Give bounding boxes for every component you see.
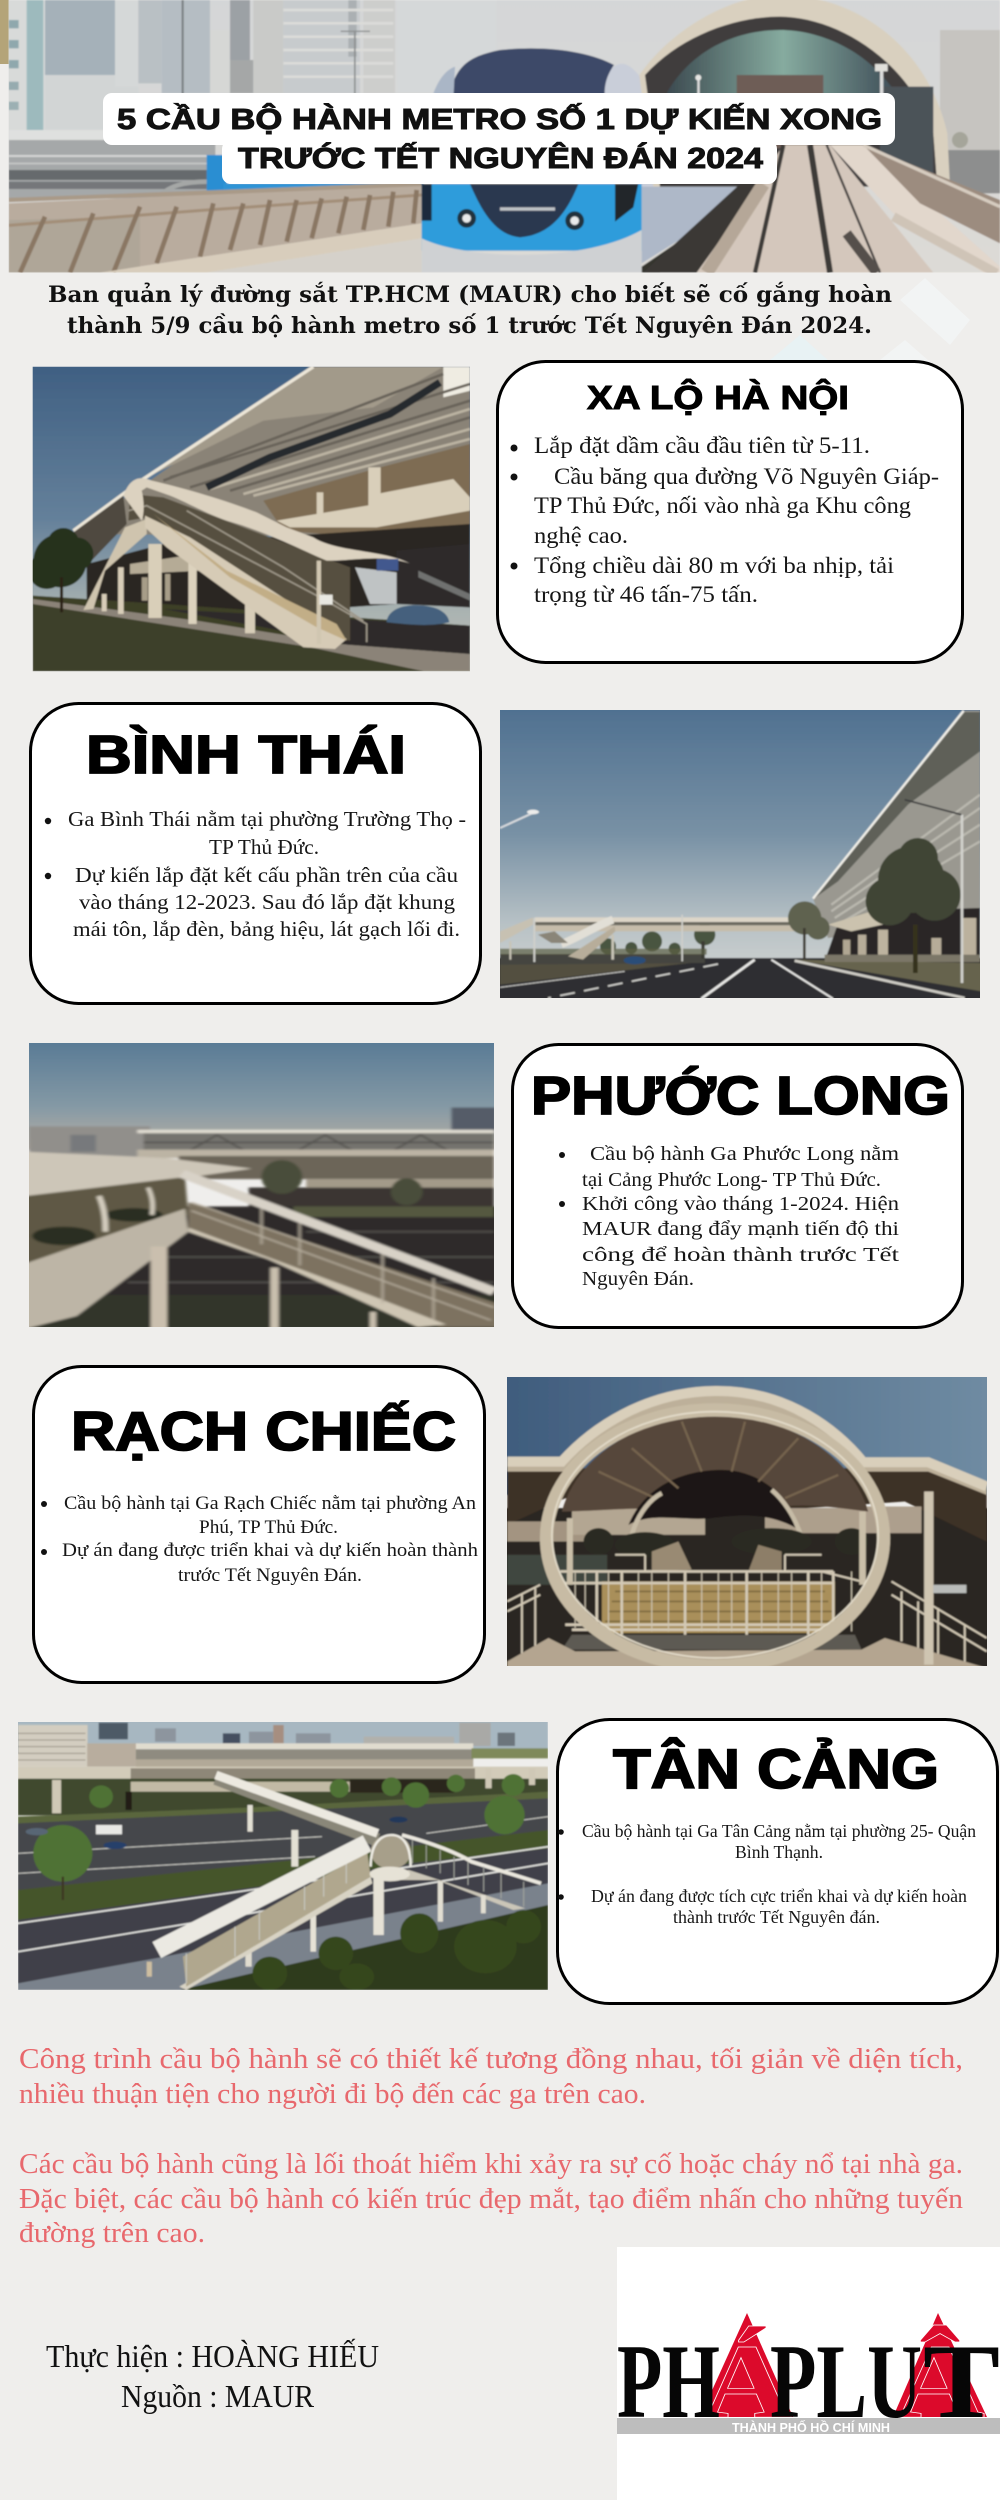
bullet list	[510, 433, 939, 607]
title background pill, second line	[222, 140, 777, 184]
closing text: đường trên cao.	[19, 2217, 205, 2249]
heading: BÌNH THÁI	[86, 725, 406, 785]
bullet list: thành trước Tết Nguyên đán.	[673, 1907, 880, 1927]
closing text	[19, 2043, 964, 2249]
intro text: thành 5/9 cầu bộ hành metro số 1 trước Tết Nguyên Đán 2024.	[67, 313, 872, 339]
logo: Pháp Luật TP.HCM: Ậ	[895, 2323, 985, 2440]
bullet list	[558, 1821, 976, 1927]
logo: Pháp Luật TP.HCM: T	[923, 2323, 1000, 2440]
title: 5 CẦU BỘ HÀNH METRO SỐ 1 DỰ KIẾN XONG	[117, 102, 882, 136]
credits: Nguồn : MAUR	[121, 2378, 315, 2414]
heading: RẠCH CHIẾC	[71, 1400, 456, 1462]
panel: Phước Long	[26, 1040, 963, 1329]
bullet list: TP Thủ Đức, nối vào nhà ga Khu công	[534, 493, 912, 518]
info box	[498, 362, 962, 662]
info box	[30, 704, 480, 1004]
bullet list	[559, 1143, 900, 1290]
bullet list: Dự kiến lắp đặt kết cấu phần trên của cầu	[75, 863, 459, 887]
closing text: nhiều thuận tiện cho người đi bộ đến các ga trên cao.	[19, 2078, 646, 2110]
title background pill, first line	[103, 93, 895, 145]
photo: Tân Cảng footbridge aerial view	[18, 1722, 548, 1990]
bullet list	[45, 807, 466, 941]
bullet list: MAUR đang đẩy mạnh tiến độ thi	[582, 1218, 900, 1240]
bullet list: trước Tết Nguyên Đán.	[178, 1565, 362, 1586]
panel: Rạch Chiếc	[34, 1366, 989, 1682]
heading: XA LỘ HÀ NỘI	[587, 378, 849, 416]
logo: Pháp Luật TP.HCM: Á	[702, 2323, 792, 2440]
bullet list: vào tháng 12-2023. Sau đó lắp đặt khung	[79, 890, 456, 914]
logo: Pháp Luật TP.HCM: PLU	[770, 2323, 922, 2440]
bullet list: Lắp đặt dầm cầu đầu tiên từ 5-11.	[534, 433, 870, 458]
logo: Pháp Luật TP.HCM: PH	[617, 2323, 720, 2440]
info box	[34, 1366, 484, 1682]
logo: Pháp Luật TP.HCM	[617, 2247, 1000, 2500]
logo: Pháp Luật TP.HCM: THÀNH PHỐ HỒ CHÍ MINH	[732, 2420, 890, 2435]
bullet list: nghệ cao.	[534, 523, 628, 548]
bullet list: mái tôn, lắp đèn, bảng hiệu, lát gạch lối đi.	[73, 917, 460, 941]
closing text: Các cầu bộ hành cũng là lối thoát hiểm khi xảy ra sự cố hoặc cháy nổ tại nhà ga.	[19, 2148, 963, 2180]
intro text	[48, 281, 892, 339]
info box	[512, 1044, 962, 1328]
bullet list: Bình Thạnh.	[735, 1842, 823, 1862]
panel: Xa Lộ Hà Nội	[28, 362, 962, 674]
hero panel: metro photo and title	[0, 0, 1000, 273]
panel: Tân Cảng	[16, 1720, 997, 2004]
bullet list: Tổng chiều dài 80 m với ba nhịp, tải	[534, 553, 894, 578]
closing text: Đặc biệt, các cầu bộ hành có kiến trúc đẹp mắt, tạo điểm nhấn cho những tuyến	[19, 2183, 964, 2215]
photo: Xa Lộ Hà Nội footbridge	[32, 366, 470, 672]
bullet list: Cầu bộ hành tại Ga Rạch Chiếc nằm tại phường An	[64, 1493, 477, 1514]
bullet list: công để hoàn thành trước Tết	[582, 1244, 900, 1266]
heading: PHƯỚC LONG	[531, 1066, 950, 1126]
bullet list	[41, 1493, 479, 1586]
photo: Rạch Chiếc arched bridge entrance	[507, 1377, 987, 1666]
bullet list: Dự án đang được triển khai và dự kiến hoàn thành	[62, 1540, 479, 1561]
bullet list: Ga Bình Thái nằm tại phường Trường Thọ -	[68, 807, 466, 831]
bullet list: tại Cảng Phước Long- TP Thủ Đức.	[582, 1169, 881, 1191]
bullet list: trọng từ 46 tấn-75 tấn.	[534, 582, 758, 607]
info box	[558, 1720, 998, 2004]
credits	[46, 2338, 379, 2414]
intro text: Ban quản lý đường sắt TP.HCM (MAUR) cho biết sẽ cố gắng hoàn	[48, 281, 892, 308]
bullet list: Cầu bộ hành tại Ga Tân Cảng nằm tại phường 25- Quận	[582, 1821, 976, 1841]
bullet list: Cầu băng qua đường Võ Nguyên Giáp-	[554, 464, 939, 489]
bullet list: Dự án đang được tích cực triển khai và dự kiến hoàn	[591, 1886, 967, 1906]
hero photo: metro train and station	[0, 0, 1000, 273]
title: TRƯỚC TẾT NGUYÊN ĐÁN 2024	[238, 141, 763, 175]
credits: Thực hiện : HOÀNG HIẾU	[46, 2338, 379, 2374]
panel: Bình Thái	[30, 704, 982, 1004]
closing text: Công trình cầu bộ hành sẽ có thiết kế tương đồng nhau, tối giản về diện tích,	[19, 2043, 963, 2075]
title	[117, 102, 882, 175]
bullet list: Khởi công vào tháng 1-2024. Hiện	[582, 1193, 899, 1215]
bullet list: Cầu bộ hành Ga Phước Long nằm	[590, 1143, 899, 1165]
photo: Bình Thái avenue and overpass	[500, 710, 980, 998]
photo: Phước Long footbridge	[29, 1043, 494, 1327]
bullet list: Phú, TP Thủ Đức.	[199, 1517, 338, 1538]
bullet list: TP Thủ Đức.	[209, 835, 319, 859]
bullet list: Nguyên Đán.	[582, 1268, 694, 1290]
heading: TÂN CẢNG	[613, 1737, 939, 1800]
